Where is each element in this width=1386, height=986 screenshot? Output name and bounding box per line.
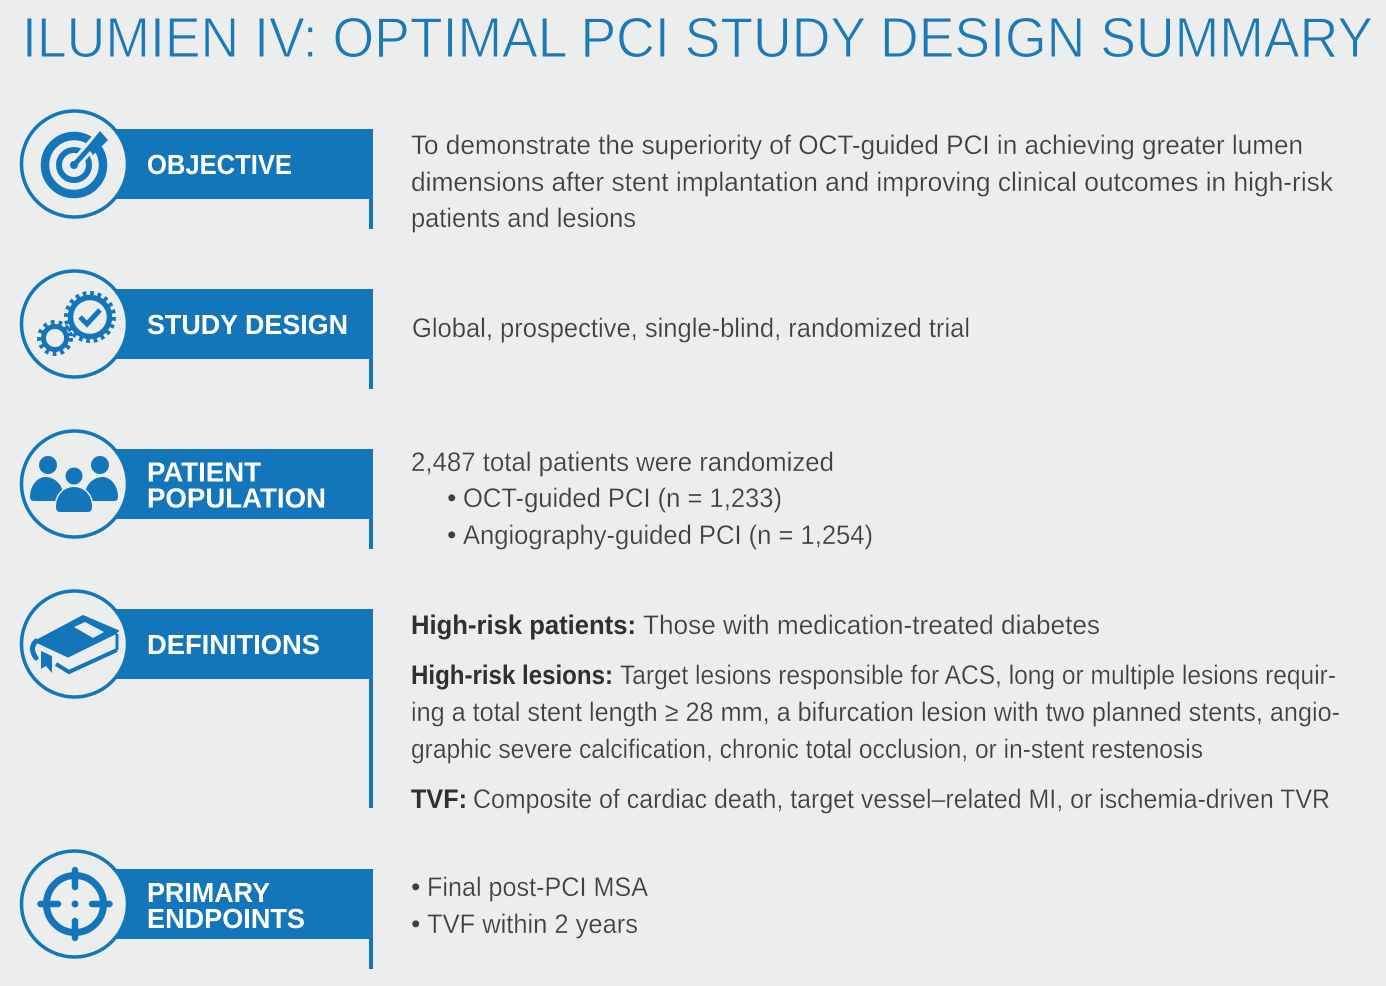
label: patient population — [147, 456, 326, 514]
text: high-risk lesions — [411, 660, 1340, 764]
text: patient population: • — [447, 483, 456, 513]
label: objective: OBJECTIVE — [147, 149, 292, 180]
text: primary endpoints: • — [411, 909, 420, 939]
text: primary endpoints: Final post-PCI MSA — [427, 872, 648, 902]
icon: book with bookmark — [22, 591, 128, 697]
text: study design: Global, prospective, single-blind, randomized trial — [412, 313, 970, 343]
text: high-risk lesions: Target lesions responsible for ACS, long or multiple lesions requir- — [620, 660, 1336, 690]
header bar: primary endpoints — [100, 869, 373, 969]
label: patient population: POPULATION — [147, 482, 326, 514]
text: objective: To demonstrate the superiority of OCT-guided PCI in achieving greater lumen — [411, 130, 1303, 160]
text: high-risk lesions: High-risk lesions: — [411, 660, 613, 690]
text: high-risk lesions: graphic severe calcification, chronic total occlusion, or in-stent restenosis — [411, 734, 1203, 764]
text: primary endpoints — [411, 872, 648, 939]
panel: definitions — [22, 591, 1340, 814]
label: patient population: PATIENT — [147, 456, 261, 488]
text: objective: patients and lesions — [411, 203, 636, 233]
icon: crosshair — [22, 851, 128, 957]
text: TVF: TVF: — [411, 784, 467, 814]
panel: primary endpoints — [22, 851, 648, 969]
icon: gears with check — [22, 271, 128, 377]
text: patient population — [411, 447, 873, 550]
text: high-risk patients: High-risk patients: — [411, 610, 636, 640]
text: objective: dimensions after stent implantation and improving clinical outcomes in high-risk — [411, 167, 1333, 197]
header bar: objective — [100, 129, 373, 229]
text: high-risk lesions: ing a total stent length ≥ 28 mm, a bifurcation lesion with two planned stents, angio- — [411, 697, 1340, 727]
panel: patient population — [22, 431, 873, 550]
label: primary endpoints: ENDPOINTS — [147, 903, 305, 934]
text: objective — [411, 130, 1333, 233]
icon: target with arrow — [22, 111, 128, 217]
panel: objective — [22, 111, 1333, 233]
panel: study design — [22, 271, 970, 389]
text: primary endpoints: • — [411, 872, 420, 902]
label: study design: STUDY DESIGN — [147, 309, 348, 340]
label: primary endpoints — [147, 877, 305, 934]
text: patient population: OCT-guided PCI (n = 1,233) — [463, 483, 782, 513]
text: high-risk patients: Those with medication-treated diabetes — [643, 610, 1100, 640]
icon: group of people — [22, 431, 128, 537]
header bar: definitions — [100, 609, 373, 808]
label: definitions: DEFINITIONS — [147, 629, 320, 660]
text: patient population: • — [447, 520, 456, 550]
text: primary endpoints: TVF within 2 years — [427, 909, 638, 939]
header bar: patient population — [100, 449, 373, 549]
text: patient population: Angiography-guided PCI (n = 1,254) — [463, 520, 873, 550]
text: TVF: Composite of cardiac death, target vessel–related MI, or ischemia-driven TVR — [473, 784, 1330, 814]
text: high-risk patients — [411, 610, 1100, 640]
label: primary endpoints: PRIMARY — [147, 877, 270, 908]
header bar: study design — [100, 289, 373, 389]
text: patient population: 2,487 total patients were randomized — [411, 447, 834, 477]
